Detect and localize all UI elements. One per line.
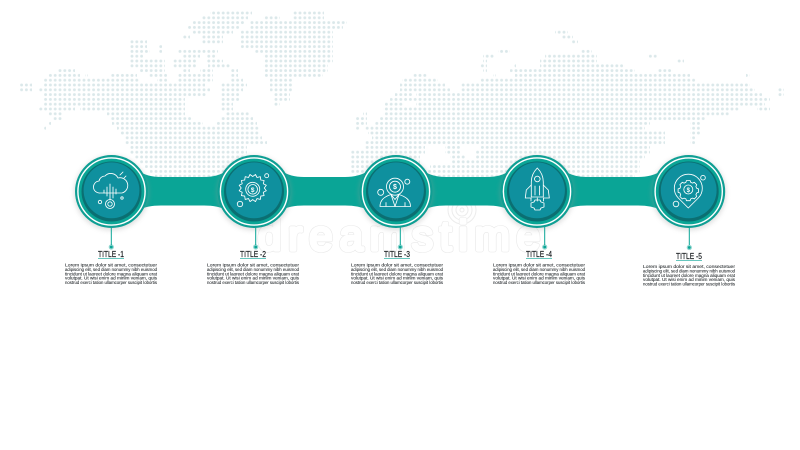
icon: businessman with coin head — [378, 178, 410, 206]
title 4: TITLE -4 — [526, 250, 552, 259]
text block 3: nostrud exerci tation ullamcorper suscipit lobortis — [351, 280, 444, 285]
text block 4: adipiscing elit, sed diam nonummy nibh euismod — [493, 267, 585, 272]
text block 5: nostrud exerci tation ullamcorper suscipit lobortis — [643, 282, 736, 287]
connector 2 — [253, 227, 258, 250]
step 2 — [207, 155, 300, 285]
text block 2: adipiscing elit, sed diam nonummy nibh euismod — [207, 267, 299, 272]
step 5 — [643, 155, 736, 287]
text block 4: tincidunt ut laoreet dolore magna aliquam erat — [493, 271, 586, 276]
dotted world map — [20, 11, 784, 179]
icon label: gear dollar: $ — [251, 187, 255, 194]
map: right landmass — [350, 30, 784, 179]
icon: map pin with gear — [673, 174, 705, 208]
circle 1 — [74, 155, 149, 230]
text block 1: Lorem ipsum dolor sit amet, consectetuer — [65, 262, 158, 268]
step 4 — [493, 155, 586, 285]
text block 3: tincidunt ut laoreet dolore magna aliquam erat — [351, 271, 444, 276]
text block 2: nostrud exerci tation ullamcorper suscipit lobortis — [207, 280, 300, 285]
step 1 — [65, 155, 158, 285]
text block 1: adipiscing elit, sed diam nonummy nibh euismod — [65, 267, 157, 272]
icon: cloud with sound bars — [93, 172, 128, 208]
text block 3 — [351, 262, 444, 285]
icon label: pin dollar: $ — [687, 188, 691, 194]
title 5: TITLE -5 — [676, 252, 702, 261]
step 3 — [351, 155, 444, 285]
text block 5: adipiscing elit, sed diam nonummy nibh euismod — [643, 268, 735, 273]
connector 5 — [687, 227, 692, 250]
text block 1 — [65, 262, 158, 285]
connector 1 — [109, 227, 114, 250]
text block 2 — [207, 262, 300, 285]
watermark logo — [448, 196, 476, 224]
text block 5 — [643, 264, 736, 287]
circle 3 — [358, 155, 434, 230]
connecting band — [139, 171, 661, 210]
title 1: TITLE -1 — [98, 250, 124, 259]
text block 5: volutpat. Ut wisi enim ad minim veniam, quis — [643, 277, 736, 282]
text block 1: tincidunt ut laoreet dolore magna aliquam erat — [65, 271, 158, 276]
circle 2 — [216, 155, 292, 230]
text block 3: Lorem ipsum dolor sit amet, consectetuer — [351, 262, 444, 268]
text block 3: adipiscing elit, sed diam nonummy nibh euismod — [351, 267, 443, 272]
text block 4 — [493, 262, 586, 285]
connector 4 — [542, 227, 547, 250]
icon: gear with dollar — [237, 174, 269, 207]
text block 3: volutpat. Ut wisi enim ad minim veniam, quis — [351, 276, 444, 281]
text block 5: tincidunt ut laoreet dolore magna aliquam erat — [643, 273, 736, 278]
watermark text core: dreamstime — [258, 212, 540, 259]
text block 4: nostrud exerci tation ullamcorper suscipit lobortis — [493, 280, 586, 285]
connector 3 — [398, 227, 403, 250]
map: left landmass — [20, 11, 347, 179]
text block 2: Lorem ipsum dolor sit amet, consectetuer — [207, 262, 300, 268]
circle 4 — [500, 155, 574, 230]
title 2: TITLE -2 — [240, 250, 266, 259]
text block 4: Lorem ipsum dolor sit amet, consectetuer — [493, 262, 586, 268]
title 3: TITLE -3 — [384, 250, 410, 259]
watermark text outline: dreamstime — [258, 212, 540, 259]
text block 1: nostrud exerci tation ullamcorper suscipit lobortis — [65, 280, 158, 285]
text block 4: volutpat. Ut wisi enim ad minim veniam, quis — [493, 276, 586, 281]
text block 2: tincidunt ut laoreet dolore magna aliquam erat — [207, 271, 300, 276]
text block 5: Lorem ipsum dolor sit amet, consectetuer — [643, 264, 736, 269]
text block 1: volutpat. Ut wisi enim ad minim veniam, quis — [65, 276, 158, 281]
watermark — [258, 196, 540, 259]
text block 2: volutpat. Ut wisi enim ad minim veniam, quis — [207, 276, 300, 281]
icon: rocket with gear — [525, 168, 549, 210]
icon label: coin dollar: $ — [393, 184, 397, 191]
circle 5 — [651, 155, 726, 230]
